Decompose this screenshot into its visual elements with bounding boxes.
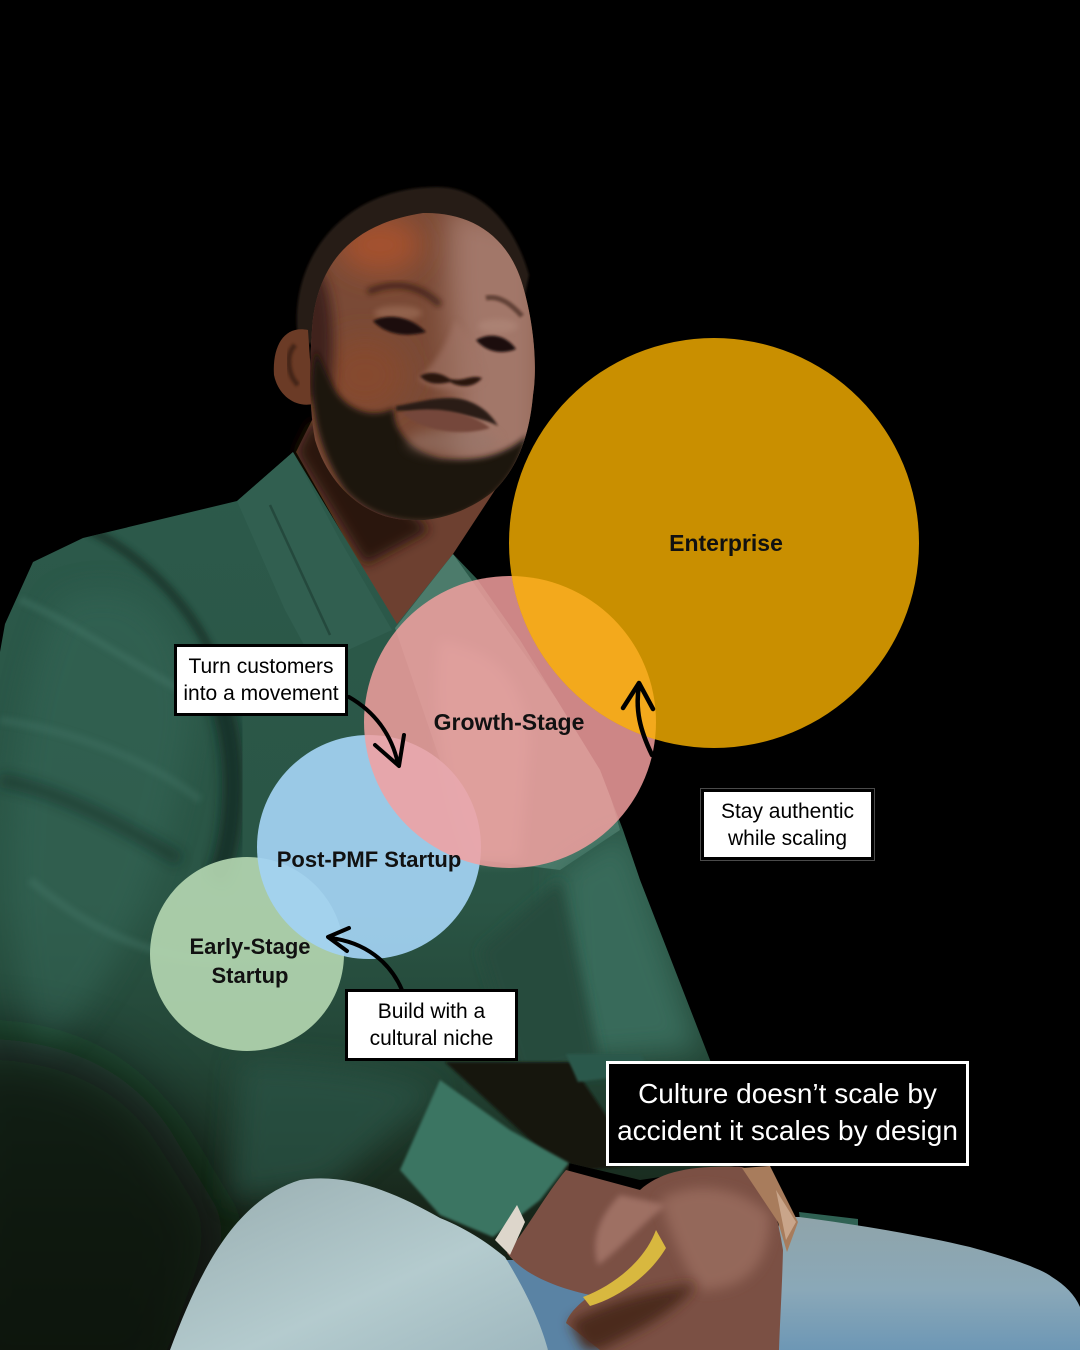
callout: Build with a cultural niche xyxy=(345,989,518,1061)
callout: Stay authentic while scaling: while scaling xyxy=(728,826,847,850)
callout: Turn customers into a movement: Turn customers xyxy=(188,655,334,678)
eye shading xyxy=(374,306,422,320)
nose xyxy=(419,330,460,390)
jacket xyxy=(0,440,760,1350)
right jacket panel xyxy=(560,830,700,1060)
sleeve cuff xyxy=(400,1080,569,1237)
callout: Turn customers into a movement xyxy=(174,644,348,716)
collar xyxy=(237,452,294,501)
beard xyxy=(313,350,528,522)
circle: Growth-Stage xyxy=(364,576,656,868)
callout: Build with a cultural niche: cultural niche xyxy=(370,1027,493,1050)
white shirt cuff xyxy=(495,1205,525,1255)
circle: Post-PMF Startup xyxy=(257,735,481,959)
head: hair xyxy=(297,187,529,345)
circle: Early-Stage Startup xyxy=(150,857,344,1051)
lower shadows xyxy=(0,1008,226,1270)
watch xyxy=(742,1166,798,1252)
chin light xyxy=(402,428,464,462)
right knee xyxy=(760,1217,1080,1350)
callout: Stay authentic while scaling: Stay authentic xyxy=(721,800,854,822)
label: Early-Stage Startup: Early-Stage xyxy=(189,934,311,959)
label: Early-Stage Startup: Startup xyxy=(212,963,288,988)
face light xyxy=(448,205,545,470)
callout: Turn customers into a movement: into a movement xyxy=(183,682,339,705)
brows xyxy=(368,286,440,305)
strip under watch xyxy=(799,1212,858,1226)
ear xyxy=(274,329,313,405)
bracelet xyxy=(583,1230,666,1306)
shirt front xyxy=(395,554,620,870)
label: Enterprise: Enterprise xyxy=(669,530,783,556)
jeans middle xyxy=(505,1260,620,1350)
moustache xyxy=(396,398,498,426)
eye left xyxy=(373,317,426,335)
callout: Build with a cultural niche: Build with a xyxy=(378,1000,485,1023)
callout: Culture doesn't scale by accident: Culture doesn’t scale by xyxy=(638,1078,937,1108)
label: Growth-Stage: Growth-Stage xyxy=(434,709,584,735)
left knee xyxy=(170,1178,548,1350)
neck xyxy=(296,420,500,630)
overlap: Enterprise and Growth-Stage xyxy=(512,576,656,740)
callout: Culture doesn't scale by accident xyxy=(606,1061,969,1166)
forearm and hand xyxy=(507,1167,783,1350)
label: Post-PMF Startup: Post-PMF Startup xyxy=(277,847,461,872)
callout: Culture doesn't scale by accident: accident it scales by design xyxy=(617,1114,958,1146)
arrow: Build with a cultural niche to Post-PMF xyxy=(328,928,402,990)
arrow: Stay authentic to Enterprise xyxy=(623,683,653,755)
face xyxy=(310,213,535,520)
arrow: Turn customers to Growth-Stage xyxy=(349,697,404,766)
callout: Stay authentic while scaling xyxy=(701,789,874,860)
circle: Enterprise xyxy=(509,338,919,748)
lips xyxy=(402,409,490,432)
eye right xyxy=(476,336,516,352)
